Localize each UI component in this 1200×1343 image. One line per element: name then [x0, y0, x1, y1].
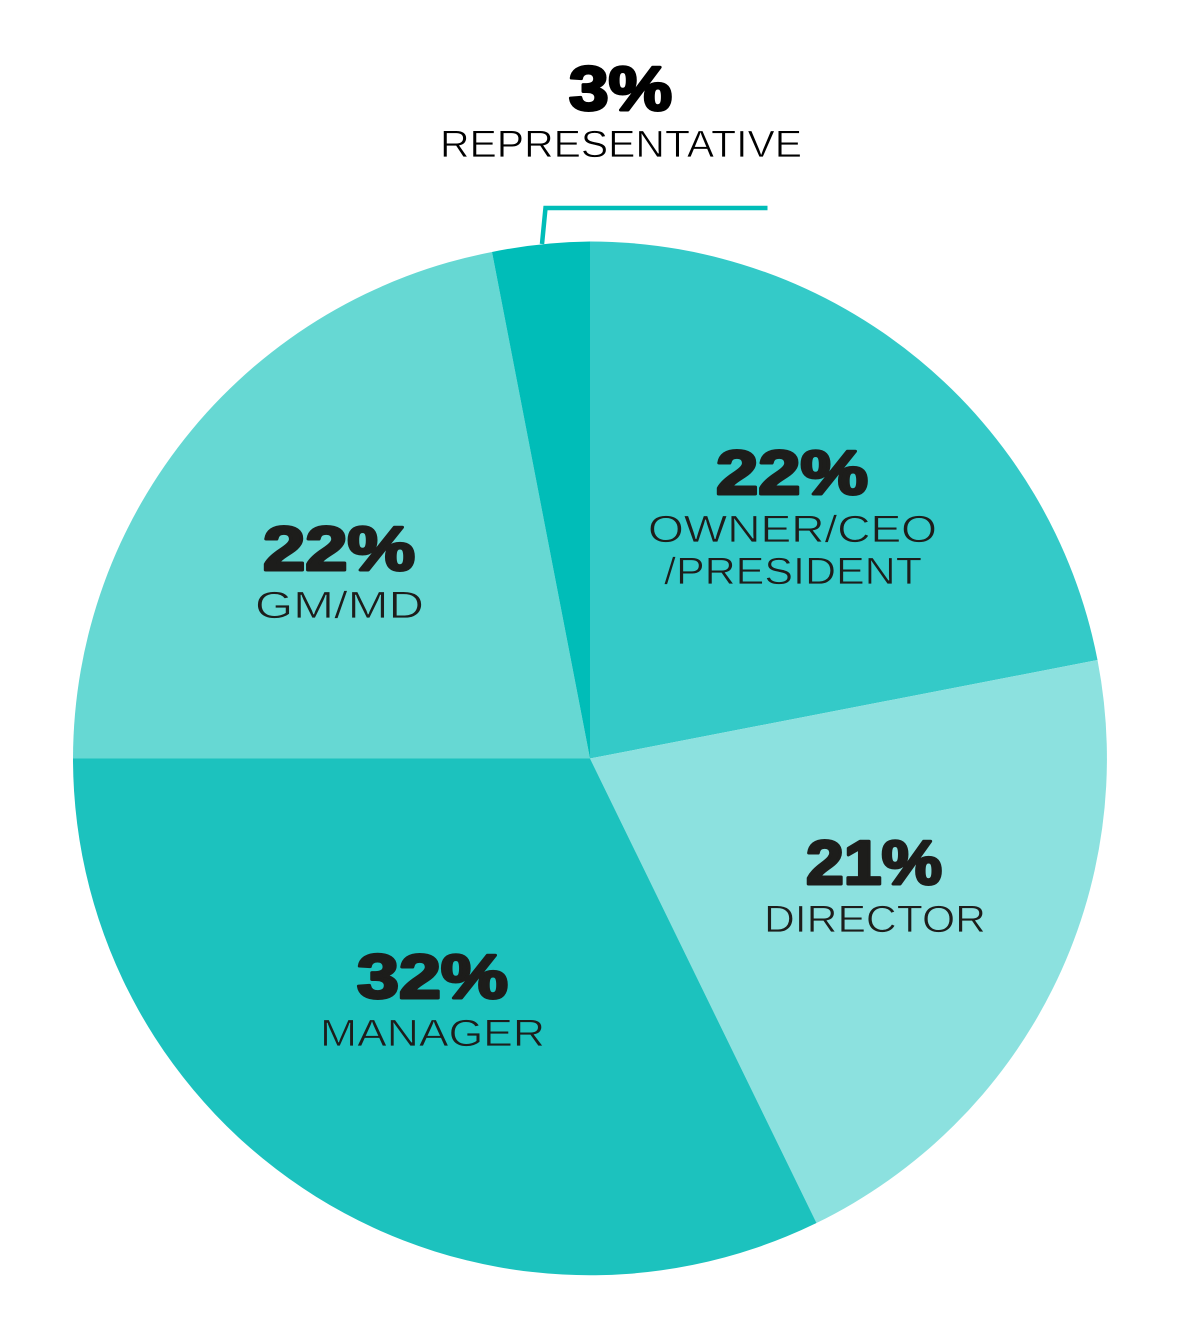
- pie chart: [73, 242, 1107, 1275]
- label: 3% representative: [440, 55, 802, 166]
- leader line: representative: [542, 208, 768, 244]
- slice: manager: [73, 758, 816, 1275]
- label: 22% GM/MD: [255, 515, 424, 627]
- label: 21% director: DIRECTOR: [764, 899, 986, 941]
- label: 22% owner/CEO/president: 22%: [716, 439, 868, 508]
- label: 22% GM/MD: 22%: [263, 515, 415, 584]
- label: 32% manager: [320, 943, 545, 1055]
- slice: director: [590, 660, 1107, 1223]
- label: 22% owner/CEO/president: OWNER/CEO: [648, 509, 937, 551]
- label: 22% owner/CEO/president: [648, 439, 937, 593]
- slice: representative: [492, 242, 590, 758]
- slice: GM/MD: [73, 252, 590, 758]
- label: 22% owner/CEO/president: /PRESIDENT: [664, 551, 922, 593]
- slice: owner/CEO/president: [590, 242, 1098, 758]
- label: 3% representative: REPRESENTATIVE: [440, 124, 802, 166]
- label: 21% director: [764, 829, 986, 941]
- label: 3% representative: 3%: [569, 55, 672, 124]
- label: 32% manager: 32%: [357, 943, 508, 1012]
- label: 32% manager: MANAGER: [320, 1013, 545, 1055]
- label: 21% director: 21%: [806, 829, 942, 898]
- label: 22% GM/MD: GM/MD: [255, 585, 424, 627]
